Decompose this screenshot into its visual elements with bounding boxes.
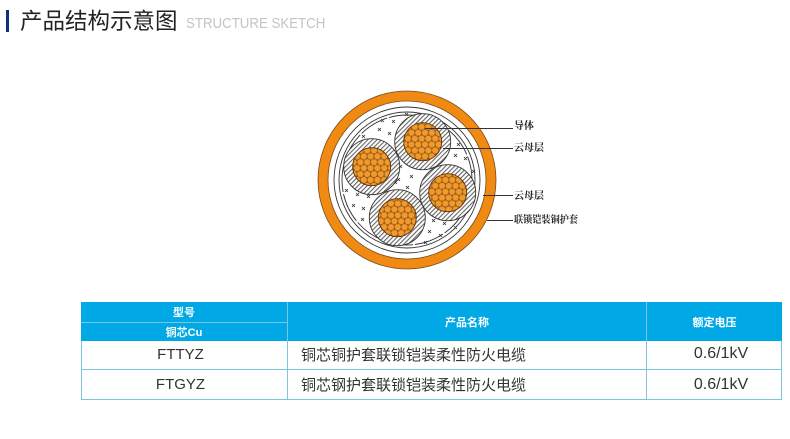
cable cross-section diagram xyxy=(318,90,578,270)
label: conductor: 导体 xyxy=(514,119,534,132)
product table xyxy=(81,302,782,400)
row 2 model: FTGYZ xyxy=(156,376,205,393)
header: copper core xyxy=(81,323,287,341)
label: mica layer lower: 云母层 xyxy=(514,189,545,202)
header: product name xyxy=(288,302,646,341)
row 2 voltage xyxy=(647,370,781,399)
conductor core lower left xyxy=(369,190,425,246)
row 1 model xyxy=(82,339,287,369)
label: interlocked armor sheath: 联锁铠装铜护套 xyxy=(514,213,578,226)
row 1 model: FTTYZ xyxy=(157,346,204,362)
labels xyxy=(514,119,578,226)
row 2 voltage: 0.6/1kV xyxy=(694,376,748,392)
leader lines xyxy=(425,128,513,220)
row 1 voltage xyxy=(647,339,781,369)
row 1 name xyxy=(288,339,646,369)
inner shield rings xyxy=(334,107,480,253)
row 1 name: 铜芯铜护套联锁铠装柔性防火电缆 xyxy=(301,346,526,364)
header: copper core: 铜芯Cu xyxy=(166,327,202,339)
header: model: 型号 xyxy=(173,307,195,319)
header: product name: 产品名称 xyxy=(445,316,489,328)
header: model xyxy=(81,302,287,322)
row 2 name: 铜芯钢护套联锁铠装柔性防火电缆 xyxy=(301,377,526,394)
heading accent bar xyxy=(6,10,9,32)
row 2 model xyxy=(82,370,287,399)
header: rated voltage: 额定电压 xyxy=(692,316,736,328)
label: mica layer upper: 云母层 xyxy=(514,141,545,154)
outer orange sheath xyxy=(323,96,491,264)
section heading xyxy=(6,9,325,34)
mica filler marks xyxy=(345,113,475,244)
heading English subtitle: STRUCTURE SKETCH xyxy=(186,16,325,32)
conductor core left xyxy=(344,139,400,195)
header: rated voltage xyxy=(647,302,782,341)
row 2 name xyxy=(288,370,646,399)
heading title: 产品结构示意图 xyxy=(20,9,178,34)
conductor core right xyxy=(420,165,476,221)
row 1 voltage: 0.6/1kV xyxy=(694,345,748,362)
conductor core top xyxy=(395,114,451,170)
